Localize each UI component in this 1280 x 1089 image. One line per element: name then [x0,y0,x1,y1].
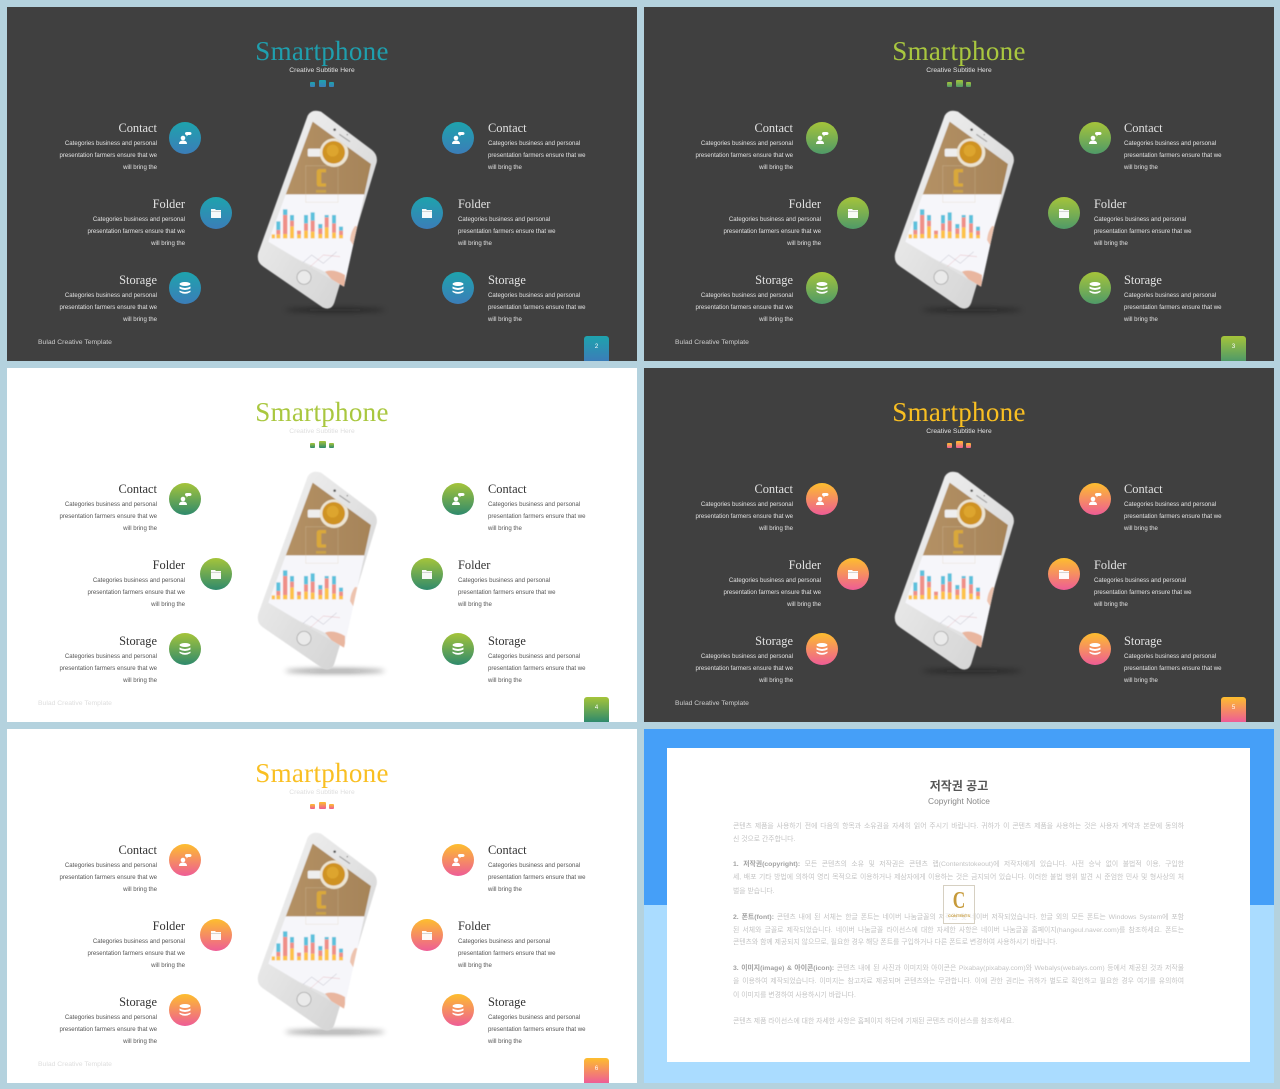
item: folder right: presentation farmers ensure that we [458,589,556,596]
page number [584,697,609,722]
slide 6: copyright notice [644,729,1274,1083]
item: folder left: presentation farmers ensure that we [723,228,821,235]
item: storage right: Categories business and personal [488,653,580,660]
decorative dots [310,441,334,448]
title: Smartphone [255,397,389,427]
notice heading: 저작권 공고 [930,779,988,793]
item: contact left: Contact [118,843,157,857]
item: folder left [87,558,232,608]
item: folder right: Folder [458,197,490,211]
item: storage left: Storage [119,273,157,287]
item: contact right: Categories business and personal [488,862,580,869]
phone image [894,471,1016,674]
item: storage right: Storage [1124,634,1162,648]
item: storage left: presentation farmers ensure that we [59,304,157,311]
slide 4: dark warm [644,368,1274,722]
page number: 3 [1232,344,1235,350]
item: folder right [1048,558,1192,608]
title: Smartphone [892,36,1026,66]
item: contact left: will bring the [123,164,157,171]
notice body: 3. 이미지(image) & 아이콘(icon): 콘텐츠 내에 된 사진과 이미지와 아이콘은 Pixabay(pixabay.com)와 Webalys(webalys.com) 등에서 제공된 것과 저작물 [733,965,1184,972]
item: folder right: Categories business and personal [1094,216,1186,223]
item: storage right: presentation farmers ensure that we [488,1026,586,1033]
item: folder left: will bring the [151,601,185,608]
item: storage left [695,272,838,323]
item: storage left: Categories business and personal [701,292,793,299]
item: folder right: will bring the [1094,240,1128,247]
item: contact right: Contact [488,843,527,857]
item: contact right: Categories business and personal [1124,501,1216,508]
item: folder left: Folder [789,197,821,211]
item: contact right [442,843,586,893]
subtitle: Creative Subtitle Here [289,428,355,435]
notice body: 벌을 받습니다. [733,888,775,895]
item: contact left [59,843,201,893]
item: storage left: presentation farmers ensure that we [59,665,157,672]
notice body: 을 이용하여 제작되었습니다. 이미지는 참고자료 제공되며 콘텐츠와는 무관합니다. 이에 관한 권리는 귀하가 별도로 확인하고 필요한 경우 여기를 유의하여 [733,978,1184,985]
notice body: 된 서체와 글꼴로 제작되었습니다. 네이버 나눔글꼴 라이선스에 대한 자세한 사항은 네이버 나눔글꼴 홈페이지(hangeul.naver.com)를 참조하세요. 폰트는 [733,927,1184,934]
item: folder left: Categories business and personal [93,216,185,223]
item: contact right: Categories business and personal [1124,140,1216,147]
item: storage left: presentation farmers ensure that we [59,1026,157,1033]
item: contact right [442,121,586,171]
item: storage left: presentation farmers ensure that we [695,665,793,672]
item: folder right: Categories business and personal [1094,577,1186,584]
item: contact left [695,121,838,171]
item: storage left: Categories business and personal [65,1014,157,1021]
slide 1: dark teal [7,7,637,361]
item: contact left: Categories business and personal [65,862,157,869]
item: contact right: Contact [488,121,527,135]
page number: 5 [1232,705,1235,711]
item: contact left: Contact [754,482,793,496]
item: storage right: will bring the [1124,316,1158,323]
item: folder right: Folder [1094,197,1126,211]
item: storage left [695,633,838,684]
item: contact left: Categories business and personal [701,140,793,147]
item: contact right: presentation farmers ensure that we [488,874,586,881]
item: folder left: Folder [789,558,821,572]
item: contact right: presentation farmers ensure that we [1124,152,1222,159]
notice body: 2. 폰트(font): 콘텐츠 내에 된 서체는 한글 폰트는 네이버 나눔글꼴의 저작권 및 네이버 저작되었습니다. 한글 외의 모든 폰트는 Windows System에 포함 [733,914,1184,921]
item: folder right: presentation farmers ensure that we [458,950,556,957]
decorative dots [310,80,334,87]
page number [584,336,609,361]
item: folder left [87,919,232,969]
item: contact left: Contact [118,482,157,496]
item: contact left: Categories business and personal [65,501,157,508]
item: folder left: presentation farmers ensure that we [87,589,185,596]
item: storage right: presentation farmers ensure that we [1124,304,1222,311]
item: storage right: presentation farmers ensure that we [488,665,586,672]
page number: 4 [595,705,598,711]
phone image [258,832,385,1038]
item: storage right [1079,272,1222,323]
item: contact right: presentation farmers ensure that we [488,152,586,159]
item: contact right [442,482,586,532]
item: contact right: Contact [1124,121,1163,135]
item: folder right: presentation farmers ensure that we [1094,589,1192,596]
page number [1221,336,1246,361]
logo caption: CONTENTS [948,913,970,918]
item: storage right: Categories business and personal [1124,292,1216,299]
item: storage right: Categories business and personal [1124,653,1216,660]
item: contact right: will bring the [488,886,522,893]
item: folder right: will bring the [1094,601,1128,608]
item: contact right [1079,482,1222,532]
item: contact right: Categories business and personal [488,501,580,508]
page number: 6 [595,1066,598,1072]
item: folder left: Categories business and personal [93,577,185,584]
center logo watermark [943,885,975,924]
item: folder right: Folder [1094,558,1126,572]
title: Smartphone [255,36,389,66]
item: folder right: will bring the [458,962,492,969]
item: contact left: presentation farmers ensure that we [59,874,157,881]
item: storage right: will bring the [488,677,522,684]
item: storage right: Storage [488,634,526,648]
item: contact right: will bring the [1124,525,1158,532]
logo letter: C [953,888,965,914]
item: folder right: presentation farmers ensure that we [1094,228,1192,235]
title: Smartphone [255,758,389,788]
footer text: Bulad Creative Template [675,339,749,346]
item: folder right [411,919,556,969]
item: contact left: presentation farmers ensure that we [59,513,157,520]
item: folder right: Categories business and personal [458,216,550,223]
phone image [257,110,379,314]
item: contact left [59,482,201,532]
item: storage right: Categories business and personal [488,1014,580,1021]
item: storage left: presentation farmers ensure that we [695,304,793,311]
item: storage right: presentation farmers ensure that we [1124,665,1222,672]
notice body [644,820,1274,1030]
item: storage right [1079,633,1222,684]
item: storage right [442,994,586,1045]
item: folder left: Categories business and personal [93,938,185,945]
item: storage left: will bring the [123,316,157,323]
footer text: Bulad Creative Template [675,700,749,707]
notice body: 1. 저작권(copyright): 모든 콘텐츠의 소유 및 저작권은 콘텐츠 랩(Contentstokeout)에 저작자에게 있습니다. 사전 승낙 없이 불법적 이용, 구입한 [733,861,1184,868]
item: storage right: Storage [488,995,526,1009]
item: storage left: will bring the [123,1038,157,1045]
subtitle: Creative Subtitle Here [289,67,355,74]
item: contact right: presentation farmers ensure that we [488,513,586,520]
item: folder left: presentation farmers ensure that we [87,950,185,957]
item: storage left: Storage [755,273,793,287]
item: storage right: will bring the [488,1038,522,1045]
item: folder left: will bring the [787,601,821,608]
item: storage left: Storage [119,634,157,648]
item: storage right: Storage [1124,273,1162,287]
item: folder right [1048,197,1192,247]
page number: 2 [595,344,598,350]
notice body: 이 이미지를 변경하여 사용하시기 바랍니다. [733,992,856,999]
item: contact right: will bring the [488,164,522,171]
item: storage right [442,272,586,323]
subtitle: Creative Subtitle Here [926,67,992,74]
item: folder right: Folder [458,919,490,933]
item: storage right: Storage [488,273,526,287]
decorative dots [947,80,971,87]
item: folder left: Folder [153,197,185,211]
item: folder left: Folder [153,558,185,572]
subtitle: Creative Subtitle Here [289,789,355,796]
item: contact right: Categories business and personal [488,140,580,147]
item: folder right: Categories business and personal [458,577,550,584]
item: folder left: Categories business and personal [729,216,821,223]
item: folder left: will bring the [151,962,185,969]
item: contact left: Categories business and personal [65,140,157,147]
item: folder right: Categories business and personal [458,938,550,945]
item: contact left: presentation farmers ensure that we [59,152,157,159]
notice body: 콘텐츠 제품을 사용하기 전에 다음의 항목과 소유권을 자세히 읽어 주시기 바랍니다. 귀하가 이 콘텐츠 제품을 사용하는 것은 사용자 계약과 본문에 동의하 [733,823,1184,830]
footer text: Bulad Creative Template [38,700,112,707]
item: folder right: will bring the [458,601,492,608]
phone image [258,472,385,677]
item: folder left [87,197,232,247]
page number [1221,697,1246,722]
subtitle: Creative Subtitle Here [926,428,992,435]
item: contact left [59,121,201,171]
item: folder left [723,558,869,608]
item: folder right: Folder [458,558,490,572]
notice body: 신 것으로 간주합니다. [733,836,795,843]
notice subheading: Copyright Notice [928,796,990,806]
item: contact right: Contact [1124,482,1163,496]
item: folder left: will bring the [151,240,185,247]
item: contact left [695,482,838,532]
notice card [667,748,1250,1062]
item: storage right [442,633,586,684]
item: folder left: presentation farmers ensure that we [87,228,185,235]
item: contact left: Categories business and personal [701,501,793,508]
notice body: 콘텐츠와 함께 제공되지 않으므로, 필요한 경우 해당 폰트를 구입하거나 다른 폰트로 변경하여 사용하시기 바랍니다. [733,939,1057,946]
item: folder left [723,197,869,247]
item: storage left: Categories business and personal [701,653,793,660]
item: storage right: will bring the [488,316,522,323]
item: storage left [59,272,201,323]
decorative dots [310,802,334,809]
item: storage left: will bring the [759,316,793,323]
item: contact right: Contact [488,482,527,496]
item: contact left: will bring the [123,525,157,532]
item: contact left: will bring the [759,525,793,532]
page number [584,1058,609,1083]
item: contact right [1079,121,1222,171]
item: contact left: presentation farmers ensure that we [695,513,793,520]
item: contact right: will bring the [488,525,522,532]
footer text: Bulad Creative Template [38,1061,112,1068]
item: folder left: will bring the [787,240,821,247]
item: storage left: will bring the [123,677,157,684]
title: Smartphone [892,397,1026,427]
item: folder right: presentation farmers ensure that we [458,228,556,235]
slide 3: light green [7,368,637,722]
item: folder right [411,558,556,608]
item: folder left: presentation farmers ensure that we [723,589,821,596]
footer text: Bulad Creative Template [38,339,112,346]
item: contact left: Contact [754,121,793,135]
item: contact right: will bring the [1124,164,1158,171]
item: storage right: presentation farmers ensure that we [488,304,586,311]
notice body: 세, 배포 기타 방법에 의하여 영리 목적으로 이용하거나 제삼자에게 이용하는 것은 금지되어 있습니다. 이러한 불법 행위 발견 시 준엄한 민사 및 형사상의 처 [733,874,1184,881]
item: contact right: presentation farmers ensure that we [1124,513,1222,520]
item: storage right: Categories business and personal [488,292,580,299]
item: storage left: Categories business and personal [65,292,157,299]
item: contact left: presentation farmers ensure that we [695,152,793,159]
item: storage left: will bring the [759,677,793,684]
item: storage left: Storage [755,634,793,648]
item: folder right [411,197,556,247]
phone image [894,110,1016,314]
item: folder left: Categories business and personal [729,577,821,584]
item: storage left [59,994,201,1045]
item: storage left: Storage [119,995,157,1009]
slide 2: dark green [644,7,1274,361]
item: storage left: Categories business and personal [65,653,157,660]
item: storage left [59,633,201,684]
decorative dots [947,441,971,448]
slide 5: light warm [7,729,637,1083]
item: storage right: will bring the [1124,677,1158,684]
item: folder left: Folder [153,919,185,933]
item: folder right: will bring the [458,240,492,247]
item: contact left: will bring the [759,164,793,171]
item: contact left: will bring the [123,886,157,893]
item: contact left: Contact [118,121,157,135]
notice body: 콘텐츠 제품 라이선스에 대한 자세한 사항은 홈페이지 하단에 기재된 콘텐츠 라이선스를 참조하세요. [733,1018,1014,1025]
